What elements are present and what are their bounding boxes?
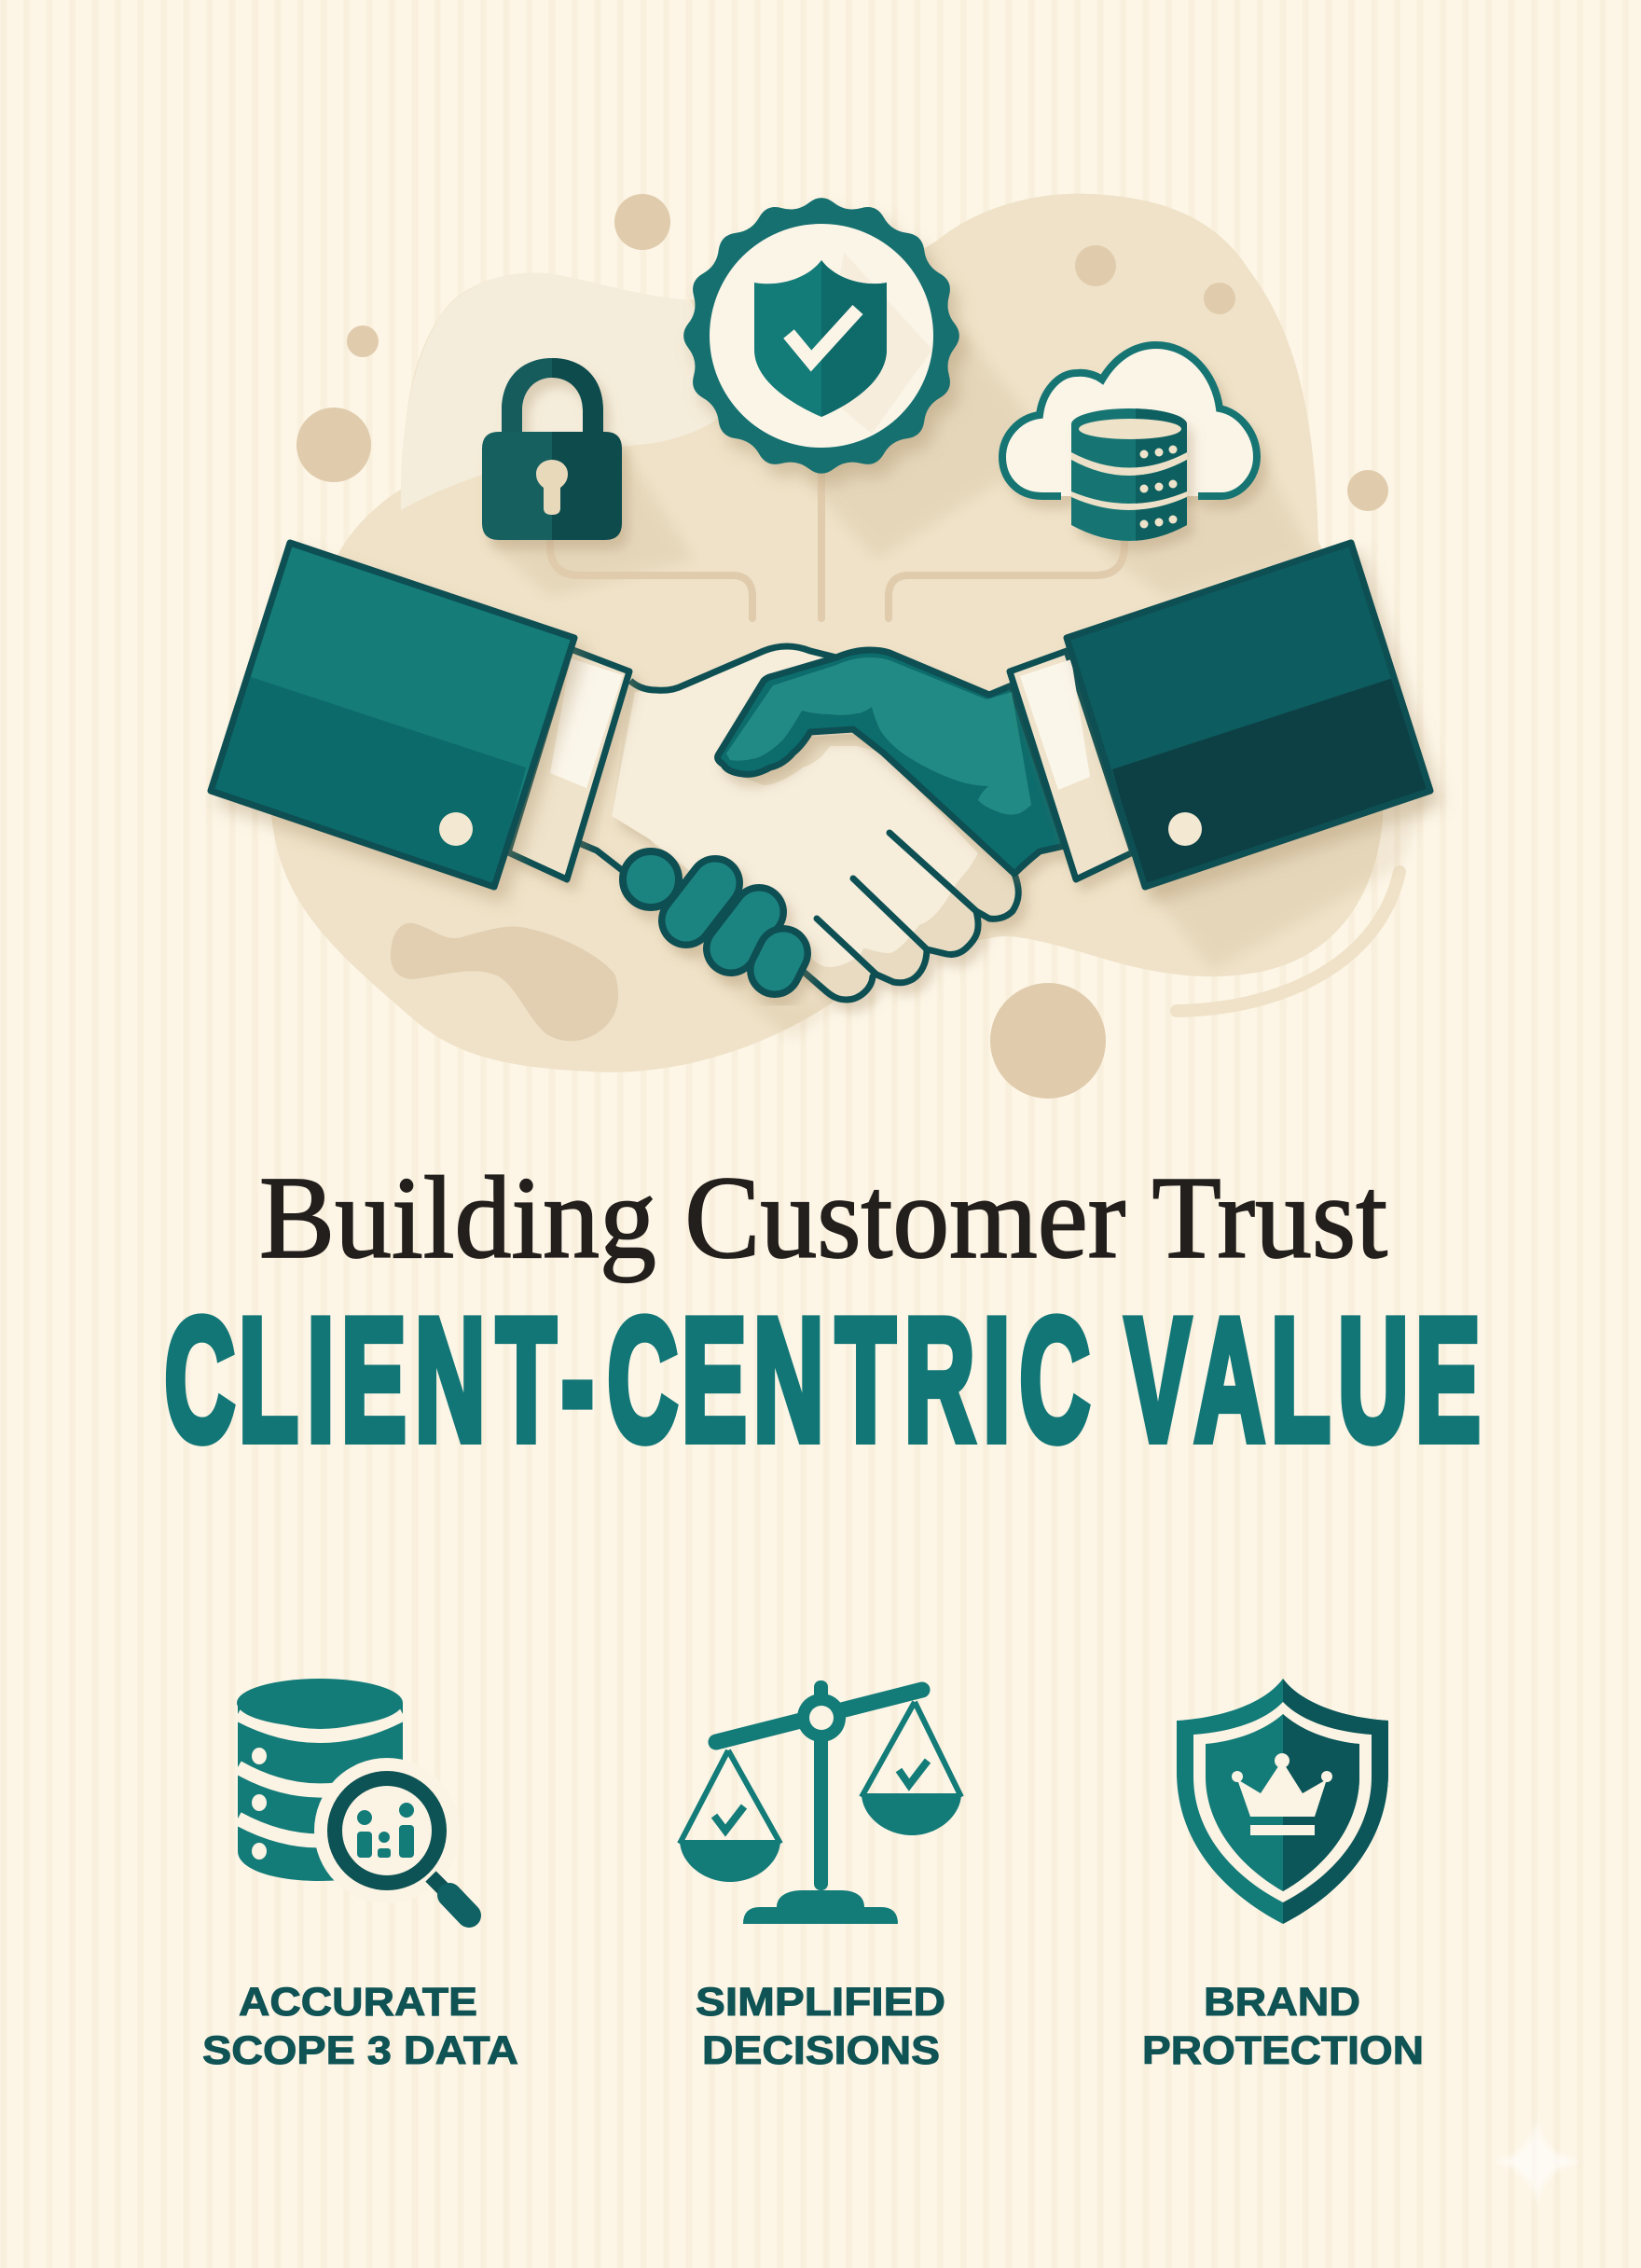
icon: cloud database bbox=[1002, 345, 1257, 541]
label: brand protection bbox=[1142, 1980, 1424, 2073]
heading: CLIENT-CENTRIC VALUE: CLIENT-CENTRIC VALUE bbox=[164, 1283, 1481, 1478]
soft long shadows bbox=[487, 317, 1430, 1040]
cream hand bbox=[579, 646, 1018, 1000]
left cuff bbox=[508, 649, 629, 879]
icon: verified shield badge bbox=[683, 198, 959, 474]
sparkle mark bbox=[1495, 2117, 1582, 2206]
background blobs bbox=[269, 194, 1384, 1072]
label: brand protection: BRAND bbox=[1204, 1980, 1360, 2025]
label: accurate scope 3 data bbox=[202, 1980, 518, 2073]
handshake illustration bbox=[211, 543, 1430, 1000]
organic blob bbox=[391, 923, 618, 1041]
label: simplified decisions bbox=[696, 1980, 945, 2073]
icon: balance scales bbox=[680, 1680, 961, 1924]
right cuff bbox=[1010, 651, 1133, 879]
label: accurate scope 3 data: ACCURATE bbox=[239, 1980, 477, 2025]
teal hand bbox=[718, 650, 1065, 874]
connector lines bbox=[550, 471, 1124, 618]
teal fingers bbox=[623, 851, 783, 970]
arc accent bbox=[1177, 872, 1400, 1011]
label: brand protection: PROTECTION bbox=[1142, 2028, 1424, 2073]
label: simplified decisions: DECISIONS bbox=[702, 2028, 940, 2073]
icon: database with magnifier bbox=[237, 1679, 469, 1915]
title: Building Customer Trust: Building Customer Trust bbox=[259, 1154, 1387, 1283]
icon: padlock bbox=[482, 358, 622, 540]
label: accurate scope 3 data: SCOPE 3 DATA bbox=[202, 2028, 518, 2073]
icon: crown shield bbox=[1177, 1679, 1388, 1924]
left sleeve bbox=[211, 543, 574, 887]
right sleeve bbox=[1067, 543, 1430, 887]
decorative circles bbox=[296, 194, 1388, 1099]
label: simplified decisions: SIMPLIFIED bbox=[696, 1980, 945, 2025]
